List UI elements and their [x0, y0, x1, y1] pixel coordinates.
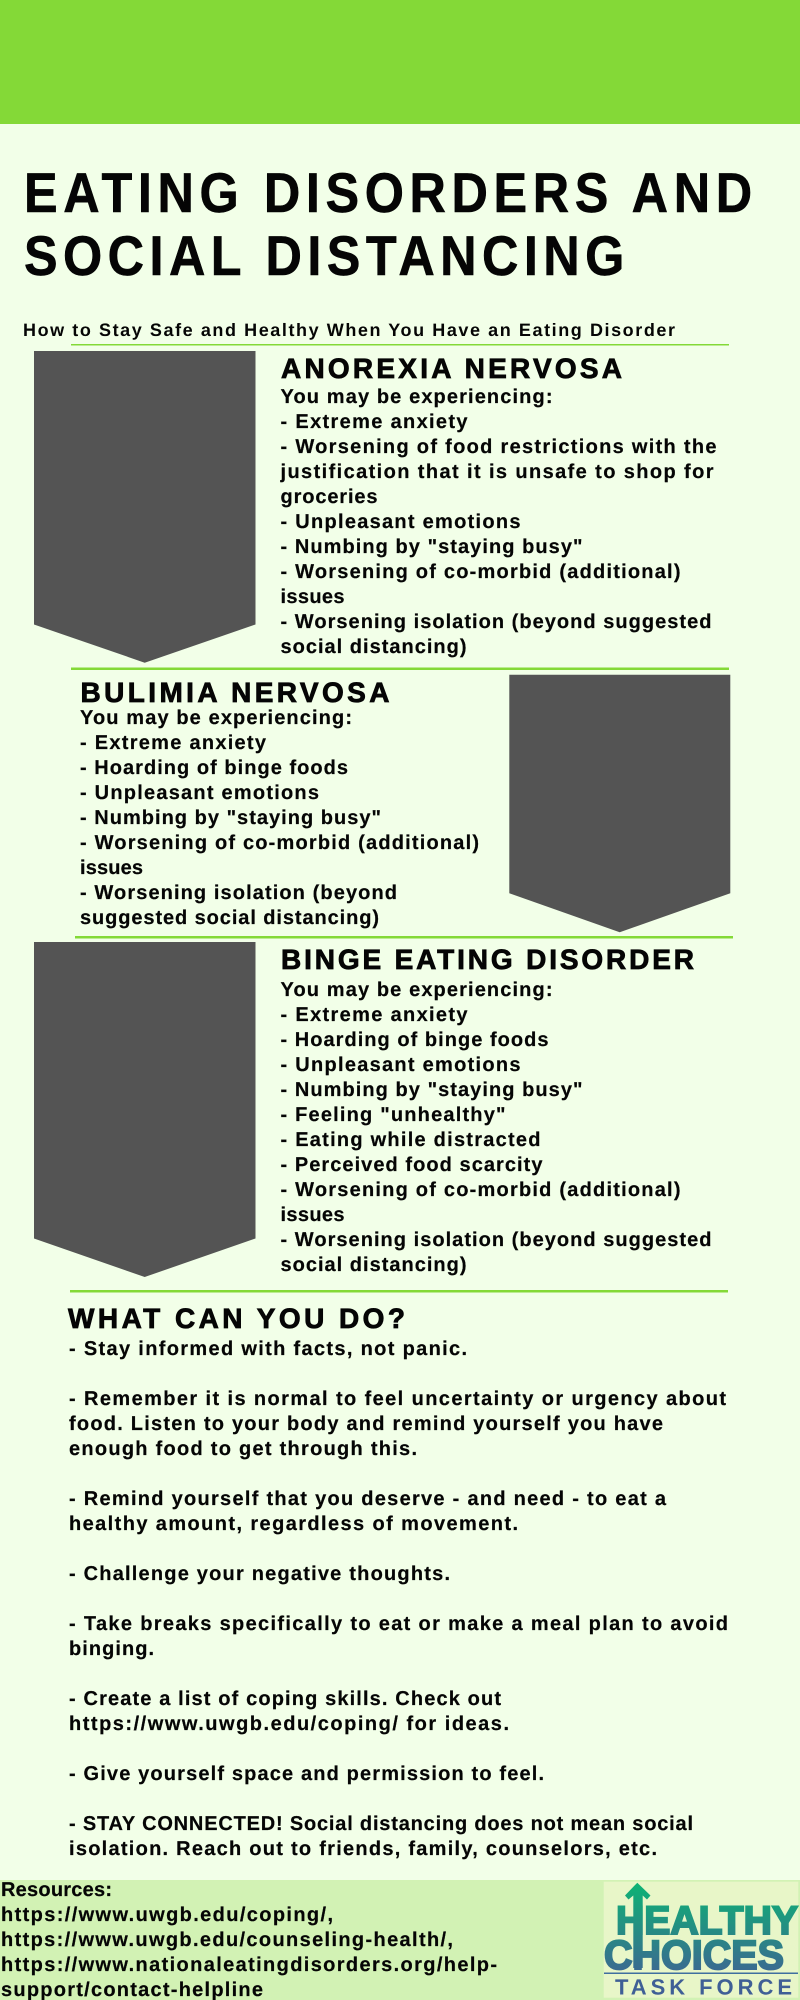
text block: binge eating symptoms: - Hoarding of binge foods: [280, 1029, 548, 1051]
text block: advice list: - STAY CONNECTED! Social distancing does not mean social: [69, 1813, 693, 1835]
text block: bulimia symptoms: - Extreme anxiety: [80, 732, 267, 754]
text block: anorexia symptoms: - Extreme anxiety: [280, 411, 468, 433]
panel: bulimia nervosa image placeholder: [509, 675, 730, 932]
logo: healthy choices task force: CHOICES: [604, 1932, 784, 1978]
header band: [0, 0, 800, 124]
text block: anorexia symptoms: groceries: [280, 486, 378, 508]
text block: advice list: [69, 1338, 728, 1860]
text block: bulimia symptoms: suggested social distancing): [80, 907, 379, 929]
text block: anorexia symptoms: - Worsening of food restrictions with the: [280, 436, 716, 458]
text block: bulimia symptoms: - Unpleasant emotions: [80, 782, 319, 804]
text block: bulimia symptoms: issues: [80, 857, 143, 879]
text block: advice list: - Take breaks specifically to eat or make a meal plan to avoid: [69, 1613, 728, 1635]
panel: anorexia nervosa image placeholder: [34, 351, 256, 663]
text block: anorexia symptoms: social distancing): [280, 636, 466, 658]
text block: bulimia symptoms: - Worsening isolation (beyond: [80, 882, 397, 904]
title: SOCIAL DISTANCING: [24, 224, 624, 287]
panel: binge eating disorder: [280, 944, 712, 1276]
text block: anorexia symptoms: You may be experiencing:: [280, 386, 552, 408]
text block: advice list: healthy amount, regardless of movement.: [69, 1513, 518, 1535]
text block: advice list: binging.: [69, 1638, 154, 1660]
text block: anorexia symptoms: - Numbing by "staying busy": [280, 536, 582, 558]
text block: advice list: isolation. Reach out to friends, family, counselors, etc.: [69, 1838, 657, 1860]
panel: anorexia nervosa: [280, 353, 716, 658]
heading: bulimia nervosa: BULIMIA NERVOSA: [80, 677, 390, 708]
text block: resources: Resources:: [1, 1879, 112, 1901]
text block: advice list: - Stay informed with facts, not panic.: [69, 1338, 467, 1360]
text block: binge eating symptoms: - Perceived food scarcity: [280, 1154, 543, 1176]
footer band: [0, 1880, 800, 2000]
text block: binge eating symptoms: You may be experiencing:: [280, 979, 552, 1001]
text block: resources: https://www.uwgb.edu/counseling-health/,: [1, 1929, 453, 1951]
text block: binge eating symptoms: - Eating while distracted: [280, 1129, 540, 1151]
text block: resources: https://www.uwgb.edu/coping/,: [1, 1904, 333, 1926]
text block: advice list: enough food to get through this.: [69, 1438, 417, 1460]
text block: binge eating symptoms: - Worsening isolation (beyond suggested: [280, 1229, 712, 1251]
text block: bulimia symptoms: - Hoarding of binge foods: [80, 757, 348, 779]
text block: advice list: - Give yourself space and permission to feel.: [69, 1763, 544, 1785]
heading: binge eating disorder: BINGE EATING DISORDER: [281, 944, 694, 975]
text block: binge eating symptoms: - Numbing by "staying busy": [280, 1079, 582, 1101]
text block: binge eating symptoms: [280, 979, 712, 1276]
title: [24, 161, 752, 287]
text block: resources: https://www.nationaleatingdisorders.org/help-: [1, 1954, 497, 1976]
text block: advice list: - Create a list of coping skills. Check out: [69, 1688, 501, 1710]
text block: anorexia symptoms: issues: [280, 586, 344, 608]
text block: advice list: food. Listen to your body and remind yourself you have: [69, 1413, 663, 1435]
logo: healthy choices task force: [604, 1882, 798, 2000]
text block: anorexia symptoms: - Worsening isolation (beyond suggested: [280, 611, 712, 633]
text block: bulimia symptoms: - Numbing by "staying busy": [80, 807, 381, 829]
text block: advice list: https://www.uwgb.edu/coping/ for ideas.: [69, 1713, 509, 1735]
panel: binge eating disorder image placeholder: [34, 942, 256, 1277]
text block: binge eating symptoms: - Feeling "unhealthy": [280, 1104, 506, 1126]
subtitle: How to Stay Safe and Healthy When You Have an Eating Disorder: [23, 320, 675, 340]
text block: anorexia symptoms: justification that it is unsafe to shop for: [280, 461, 714, 483]
panel: bulimia nervosa: [80, 677, 479, 929]
text block: binge eating symptoms: social distancing): [280, 1254, 466, 1276]
text block: binge eating symptoms: - Unpleasant emotions: [280, 1054, 520, 1076]
text block: anorexia symptoms: - Unpleasant emotions: [280, 511, 520, 533]
text block: resources: [1, 1879, 497, 2000]
logo: healthy choices task force: TASK FORCE: [615, 1974, 792, 2000]
text block: binge eating symptoms: - Worsening of co-morbid (additional): [280, 1179, 680, 1201]
logo: healthy choices task force: HEALTHY: [616, 1899, 798, 1943]
text block: bulimia symptoms: [80, 707, 479, 929]
panel: what can you do: [68, 1303, 728, 1860]
text block: advice list: - Remember it is normal to feel uncertainty or urgency about: [69, 1388, 726, 1410]
text block: advice list: - Remind yourself that you deserve - and need - to eat a: [69, 1488, 667, 1510]
text block: anorexia symptoms: [280, 386, 716, 658]
heading: anorexia nervosa: ANOREXIA NERVOSA: [281, 353, 622, 384]
text block: advice list: - Challenge your negative thoughts.: [69, 1563, 450, 1585]
text block: bulimia symptoms: You may be experiencing:: [80, 707, 352, 729]
text block: binge eating symptoms: issues: [280, 1204, 344, 1226]
heading: what can you do: WHAT CAN YOU DO?: [68, 1303, 405, 1334]
text block: anorexia symptoms: - Worsening of co-morbid (additional): [280, 561, 680, 583]
text block: binge eating symptoms: - Extreme anxiety: [280, 1004, 468, 1026]
text block: bulimia symptoms: - Worsening of co-morbid (additional): [80, 832, 479, 854]
title: EATING DISORDERS AND: [24, 161, 752, 224]
icon: up arrow: [625, 1883, 650, 1968]
